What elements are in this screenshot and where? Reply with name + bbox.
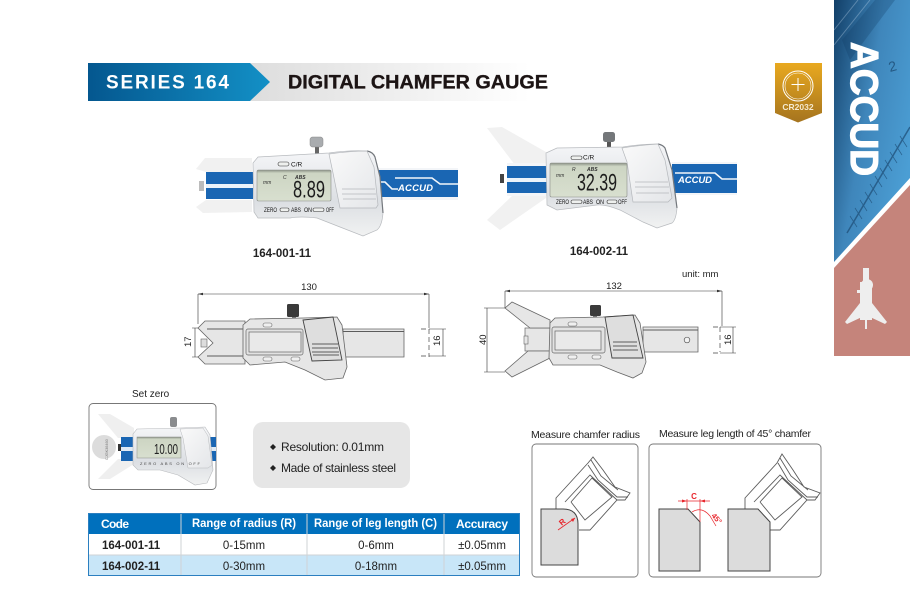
LCD text: R (572, 167, 576, 173)
bullet: resolution: Resolution: 0.01mm (281, 440, 384, 454)
button labels: C/R (583, 154, 594, 162)
header banner (88, 63, 548, 101)
LCD text: mm (263, 180, 271, 186)
button labels: ON (304, 207, 312, 214)
product code 1: 164-001-11 (253, 248, 312, 260)
LCD text: C (283, 175, 287, 181)
chamfer block (659, 509, 700, 571)
dimension 16: 16 (723, 334, 734, 345)
row 164-002-11: ±0.05mm (458, 561, 506, 573)
table header: Range of leg length (C) (314, 516, 437, 530)
display cover (329, 151, 378, 208)
gauge body (546, 144, 677, 228)
panel: features (253, 422, 410, 488)
technical drawing: 164-001-11 (183, 282, 446, 380)
row 164-002-11 (88, 555, 520, 576)
ACCUD rail logo: ACCUD (397, 183, 433, 194)
table header: Range of radius (R) (192, 516, 296, 530)
set zero caption: Set zero (132, 389, 170, 400)
thumb wheel (603, 132, 615, 148)
panel: measure chamfer radius (532, 444, 638, 577)
row 164-001-11: 164-001-11 (102, 540, 161, 552)
table header: Code (101, 517, 129, 531)
sidebar: blue ruler panel (834, 0, 910, 262)
caption: leg length: Measure leg length of 45° chamfer (659, 428, 812, 440)
setting ring text: CJGK36460 (105, 439, 109, 460)
LCD text: mm (556, 173, 564, 179)
dimension 16 (713, 327, 736, 353)
title: DIGITAL CHAMFER GAUGE (288, 72, 548, 94)
product photo: 164-001-11 (196, 137, 458, 236)
dimension 40 (478, 308, 505, 372)
dimension 132: 132 (606, 281, 622, 292)
dimension 40: 40 (478, 334, 489, 345)
button labels: ZERO (556, 199, 569, 206)
LCD text: 8.89 (293, 176, 325, 204)
row 164-001-11 (88, 534, 520, 555)
button labels (556, 154, 627, 206)
button labels: ON (596, 199, 604, 206)
row 164-001-11: ±0.05mm (458, 540, 506, 552)
gauge outline (745, 454, 820, 530)
button labels: C/R (291, 162, 302, 168)
row 164-001-11: 0-6mm (358, 540, 394, 552)
product code 2: 164-002-11 (570, 246, 629, 258)
button labels: OFF (326, 207, 334, 214)
R annotation: R (557, 517, 568, 527)
caption: chamfer radius: Measure chamfer radius (531, 429, 640, 441)
unit label: unit: mm (682, 269, 719, 280)
technical drawing: 164-002-11 (478, 281, 736, 378)
dimension 17: 17 (183, 336, 194, 347)
C annotation (678, 492, 710, 522)
product photo: 164-002-11 (487, 127, 737, 230)
dimension 132 (505, 281, 722, 326)
row 164-002-11: 164-002-11 (102, 561, 161, 573)
panel: set zero photo (89, 404, 216, 490)
LCD text: 32.39 (577, 170, 617, 196)
gauge outline (556, 457, 630, 530)
panel: measure leg length (649, 444, 821, 577)
dimension 16 (421, 329, 446, 357)
dimension 130 (198, 282, 429, 328)
small labels: ZERO ABS ON OFF (140, 461, 201, 466)
row 164-001-11: 0-15mm (223, 540, 265, 552)
LCD text (556, 167, 617, 196)
row 164-002-11: 0-30mm (223, 561, 265, 573)
spec table (88, 513, 520, 576)
gauge body (253, 151, 383, 236)
LCD (257, 170, 331, 201)
button labels (264, 162, 334, 214)
display cover (622, 144, 672, 202)
ACCUD rail logo: ACCUD (677, 175, 712, 186)
battery badge (775, 63, 822, 122)
dimension 16: 16 (432, 335, 443, 346)
button labels: OFF (618, 199, 627, 206)
45 degree annotation: 45° (710, 511, 724, 526)
workpiece block (541, 509, 578, 565)
dimension 130: 130 (301, 282, 317, 293)
badge text: CR2032 (782, 102, 814, 112)
sidebar: red tool panel (834, 185, 910, 356)
row 164-002-11: 0-18mm (355, 561, 397, 573)
dimension 17 (183, 328, 198, 357)
button labels: ABS (291, 207, 302, 214)
icon: depth gauge (845, 268, 887, 329)
ruler numeral: 2 (887, 57, 899, 75)
LCD reading: 10.00 (154, 441, 178, 458)
workpiece block (728, 509, 770, 571)
series arrow (88, 63, 270, 101)
thumb wheel (310, 137, 323, 155)
brand wordmark: ACCUD (842, 42, 885, 176)
LCD text: ABS (294, 175, 306, 181)
series label: SERIES 164 (106, 72, 229, 94)
button labels: ABS (583, 199, 594, 206)
bullet: material: Made of stainless steel (281, 461, 396, 475)
table header: Accuracy (456, 517, 508, 531)
LCD text (263, 175, 325, 204)
table header (88, 513, 520, 534)
45 degree annotation (692, 510, 724, 526)
button labels: ZERO (264, 207, 277, 214)
LCD (550, 163, 627, 197)
LCD text: ABS (586, 167, 598, 173)
C annotation: C (691, 492, 697, 501)
